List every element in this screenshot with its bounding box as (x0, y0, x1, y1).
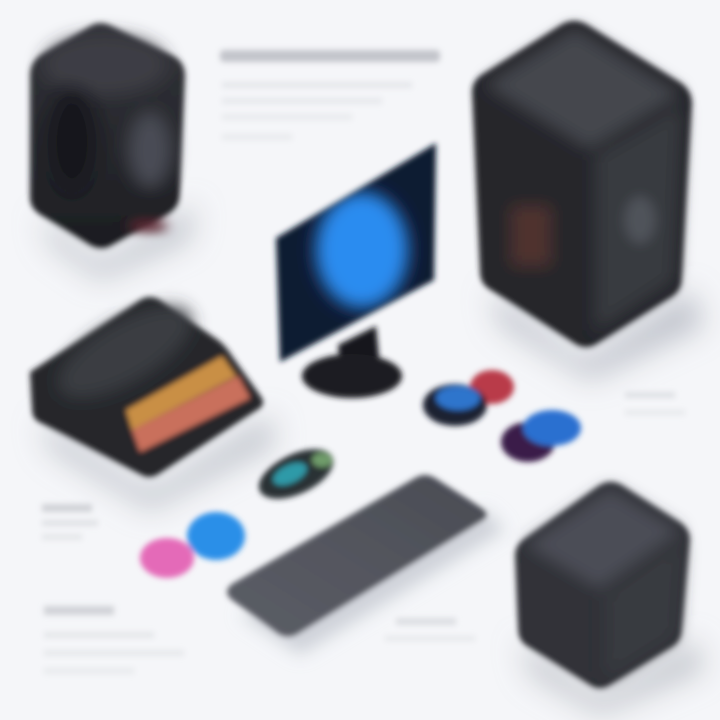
icons: blue and red discs (423, 370, 514, 426)
cube: bottom right (515, 482, 705, 715)
monitor stand (302, 326, 402, 398)
icon: small teal device (251, 439, 341, 509)
tower: top left (30, 23, 195, 280)
tower: top right (472, 21, 705, 380)
icons: pink and blue discs (140, 512, 245, 578)
text block: right middle (625, 392, 685, 415)
text block: bottom left (44, 606, 184, 674)
coloured drive stripes (126, 356, 250, 452)
text block: bottom centre (385, 618, 475, 641)
text block: left middle (42, 504, 98, 540)
device: left box with coloured drives (30, 289, 275, 510)
monitor (276, 143, 436, 398)
icons: blue and purple discs (501, 410, 581, 462)
keyboard (227, 475, 505, 655)
text block: top centre (220, 50, 440, 140)
